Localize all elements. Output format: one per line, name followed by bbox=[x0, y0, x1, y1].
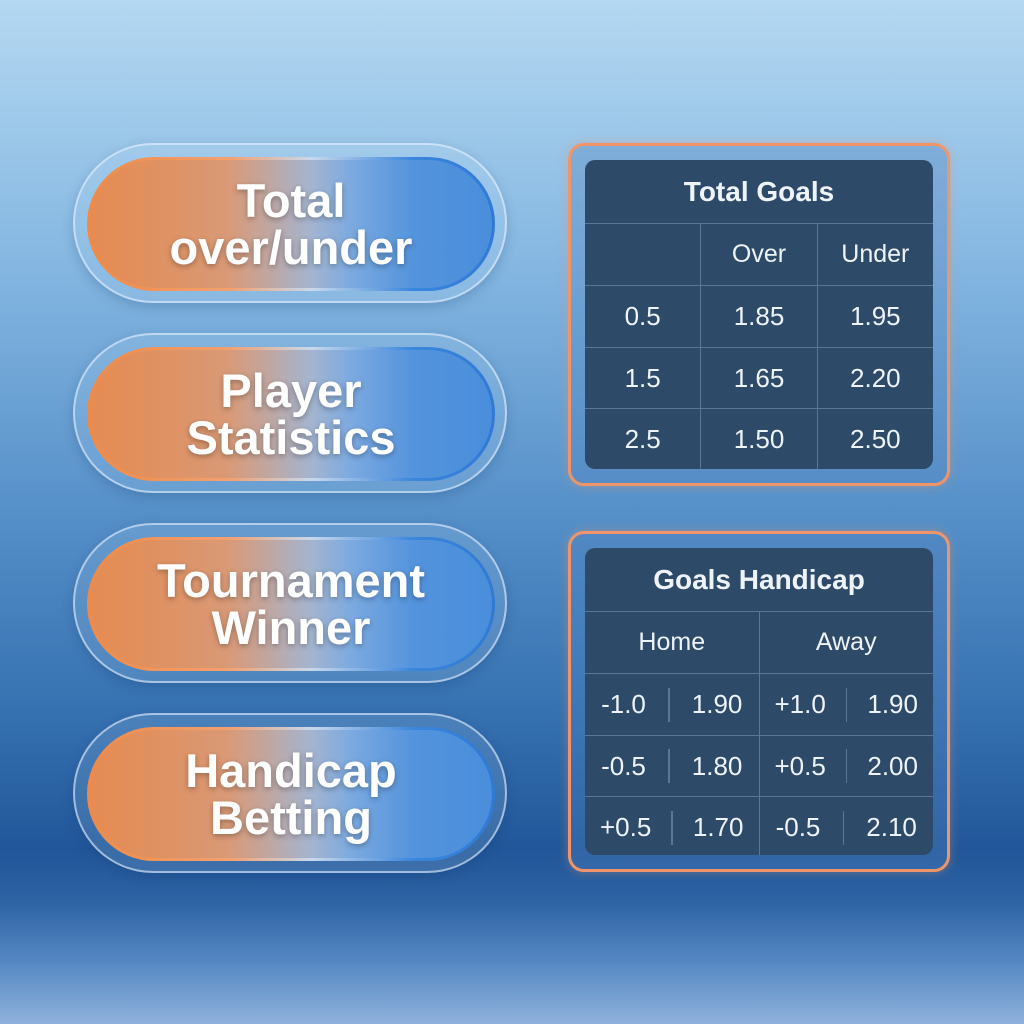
pill: Handicap Betting: Betting bbox=[210, 791, 372, 844]
table: Goals Handicap: -0.5 bbox=[601, 750, 646, 780]
table: Total Goals: 2.50 bbox=[850, 424, 901, 454]
table: Total Goals: 1.50 bbox=[734, 424, 784, 454]
table: Goals Handicap: +0.5 bbox=[600, 812, 651, 842]
table: Goals Handicap: 1.80 bbox=[692, 750, 742, 780]
pill: Handicap Betting bbox=[73, 713, 507, 873]
table: Goals Handicap: 2.10 bbox=[866, 812, 917, 842]
table: Total Goals bbox=[568, 143, 950, 486]
pill: Total over/under: over/under bbox=[170, 221, 412, 274]
pill: Player Statistics: Statistics bbox=[186, 411, 395, 464]
table: Total Goals: 1.65 bbox=[734, 362, 784, 392]
pill: Total over/under bbox=[73, 143, 507, 303]
table: Total Goals: 1.5 bbox=[625, 362, 661, 392]
table: Goals Handicap: 2.00 bbox=[867, 750, 918, 780]
table: Total Goals: 2.20 bbox=[850, 362, 901, 392]
table: Total Goals: 1.95 bbox=[850, 301, 901, 331]
table title: Goals Handicap bbox=[653, 564, 865, 594]
table title: Total Goals bbox=[684, 176, 834, 206]
table: Total Goals: Under bbox=[841, 240, 909, 268]
pill: Tournament Winner bbox=[73, 523, 507, 683]
table: Goals Handicap: 1.90 bbox=[692, 689, 742, 719]
pill: Tournament Winner: Tournament bbox=[157, 554, 425, 607]
table: Total Goals: 1.85 bbox=[734, 301, 784, 331]
table: Total Goals: Over bbox=[732, 240, 786, 268]
pill: Tournament Winner: Winner bbox=[212, 601, 370, 654]
pill: Total over/under: Total bbox=[237, 174, 345, 227]
pill: Handicap Betting: Handicap bbox=[185, 744, 397, 797]
table: Goals Handicap: -0.5 bbox=[776, 812, 820, 842]
pill: Player Statistics bbox=[73, 333, 507, 493]
table: Goals Handicap: +0.5 bbox=[774, 750, 826, 780]
table: Goals Handicap bbox=[568, 531, 950, 872]
table: Goals Handicap: 1.90 bbox=[867, 689, 918, 719]
table: Goals Handicap: 1.70 bbox=[693, 812, 743, 842]
table: Total Goals: 0.5 bbox=[625, 301, 661, 331]
table: Goals Handicap: +1.0 bbox=[774, 689, 826, 719]
pill: Player Statistics: Player bbox=[220, 364, 362, 417]
table: Goals Handicap: Away bbox=[816, 628, 877, 656]
table: Goals Handicap: Home bbox=[638, 628, 705, 656]
table: Total Goals: 2.5 bbox=[625, 424, 661, 454]
table: Goals Handicap: -1.0 bbox=[601, 689, 646, 719]
